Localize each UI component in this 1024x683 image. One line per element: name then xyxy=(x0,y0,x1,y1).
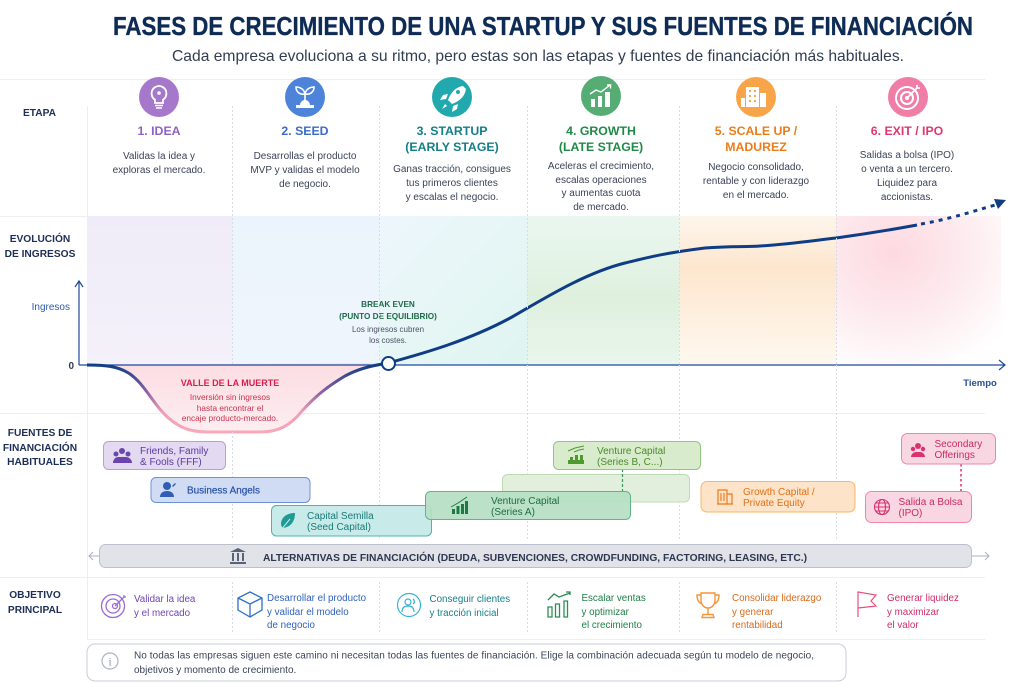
callout: break even: los costes. xyxy=(369,336,407,345)
text: exit description: accionistas. xyxy=(881,192,933,203)
funding: secondary offerings: Offerings xyxy=(934,450,975,461)
funding: salida a bolsa: (IPO) xyxy=(898,508,922,519)
callout: valle de la muerte: hasta encontrar el xyxy=(197,403,263,413)
arrows: left and right xyxy=(89,552,989,560)
funding: growth capital: Growth Capital / xyxy=(743,487,815,498)
stage 1: idea xyxy=(113,77,205,176)
objective 4: y optimizar xyxy=(582,607,630,618)
subtitle: Cada empresa evoluciona a su ritmo, pero estas son las etapas y fuentes de financiación más habituales. xyxy=(172,48,904,65)
callout: break even: (PUNTO DE EQUILIBRIO) xyxy=(339,312,437,321)
row label: etapa: ETAPA xyxy=(23,108,57,119)
objective 5: Consolidar liderazgo xyxy=(732,593,822,604)
text: seed description: de negocio. xyxy=(279,179,331,190)
callout: valle de la muerte: Inversión sin ingresos xyxy=(190,392,270,402)
text: idea description: exploras el mercado. xyxy=(113,165,205,176)
heading: growth: 4. GROWTH xyxy=(566,124,636,138)
axis label: tiempo: Tiempo xyxy=(963,378,997,389)
curve: valley of death xyxy=(87,363,388,432)
heading: seed: 2. SEED xyxy=(281,124,329,138)
callout: note xyxy=(87,644,846,681)
callout: valle de la muerte: encaje producto-mercado. xyxy=(182,413,278,423)
icon: growth xyxy=(568,446,584,464)
objective 5: y generar xyxy=(732,607,774,618)
funding: growth capital xyxy=(701,482,855,512)
funding: friends family fools: & Fools (FFF) xyxy=(140,457,202,468)
row label: fuentes de financiacion: FINANCIACIÓN xyxy=(3,441,77,454)
funding: secondary offerings: Secondary xyxy=(934,439,982,450)
funding: alternativas: ALTERNATIVAS DE FINANCIACIÓN (DEUDA, SUBVENCIONES, CROWDFUNDING, FACTORING, LEASING, ETC.) xyxy=(263,551,807,564)
objective 6: el valor xyxy=(887,620,919,631)
stage 4: growth xyxy=(548,76,654,213)
funding: business angels: Business Angels xyxy=(187,486,260,496)
callout: break even: Los ingresos cubren xyxy=(352,325,424,334)
funding: venture capital series a: (Series A) xyxy=(491,507,535,518)
icon: bars xyxy=(451,497,468,514)
objective 2: de negocio xyxy=(267,620,315,631)
funding: venture capital series b xyxy=(554,442,700,470)
icon: investor xyxy=(160,482,176,497)
row label: objetivo principal: PRINCIPAL xyxy=(8,605,62,616)
callout: break even: BREAK EVEN xyxy=(361,300,415,309)
icon: seedling xyxy=(285,77,325,117)
row label: fuentes de financiacion: HABITUALES xyxy=(7,457,73,468)
heading: exit: 6. EXIT / IPO xyxy=(871,124,944,138)
stage 3: startup xyxy=(393,77,511,203)
funding: capital semilla: (Seed Capital) xyxy=(307,522,371,533)
text: exit description: Liquidez para xyxy=(877,178,937,189)
funding: capital semilla: Capital Semilla xyxy=(307,511,374,522)
objective 5: rentabilidad xyxy=(732,620,783,631)
funding: venture capital series a: Venture Capital xyxy=(491,496,559,507)
text: growth description: de mercado. xyxy=(573,202,629,213)
funding: salida a bolsa xyxy=(866,492,972,522)
callout: valle de la muerte xyxy=(181,378,279,423)
icon: flag xyxy=(858,592,876,617)
row label: fuentes de financiacion: FUENTES DE xyxy=(8,428,72,439)
axis label: ingresos: Ingresos xyxy=(32,302,70,313)
panel: revenue evolution chart xyxy=(5,199,1006,432)
icon: globe xyxy=(874,500,890,514)
stage 6: exit xyxy=(860,77,954,203)
icon: target xyxy=(102,594,126,618)
text: scale up description: rentable y con liderazgo xyxy=(703,176,810,187)
valley of death area xyxy=(87,363,388,432)
objective 1: y el mercado xyxy=(134,608,191,619)
text: scale up description: en el mercado. xyxy=(723,190,789,201)
icon: box xyxy=(238,592,262,617)
callout: break even xyxy=(339,300,437,345)
text: growth description: Aceleras el crecimiento, xyxy=(548,161,654,172)
heading: idea: 1. IDEA xyxy=(137,124,181,138)
objective 6: Generar liquidez xyxy=(887,593,959,604)
text: exit description: Salidas a bolsa (IPO) xyxy=(860,150,954,161)
row label: objetivo principal: OBJETIVO xyxy=(9,590,61,601)
text: startup description: tus primeros clientes xyxy=(406,178,498,189)
callout: valle de la muerte: VALLE DE LA MUERTE xyxy=(181,378,279,388)
text: seed description: Desarrollas el producto xyxy=(254,151,357,162)
funding: growth capital: Private Equity xyxy=(743,498,805,509)
objective 4 xyxy=(548,592,646,631)
icon: info xyxy=(102,653,118,669)
callout: note: objetivos y momento de crecimiento. xyxy=(134,665,296,676)
axis label: zero: 0 xyxy=(68,361,74,372)
row label: evolucion de ingresos: DE INGRESOS xyxy=(5,249,76,260)
funding: alternativas xyxy=(89,544,989,568)
heading: growth: (LATE STAGE) xyxy=(559,140,643,154)
icon: light bulb xyxy=(139,77,179,117)
connector: ipo to secondary xyxy=(960,464,962,491)
text: growth description: y aumentas cuota xyxy=(562,188,641,199)
objective 3: Conseguir clientes xyxy=(430,594,510,605)
row label: evolucion de ingresos: EVOLUCIÓN xyxy=(10,232,70,245)
objective 4: el crecimiento xyxy=(582,620,642,631)
icon: info: i xyxy=(108,654,112,668)
heading: scale up: 5. SCALE UP / xyxy=(715,124,798,138)
text: exit description: o venta a un tercero. xyxy=(861,164,953,175)
marker: break even xyxy=(382,357,395,370)
icon: office building xyxy=(717,490,733,504)
axes xyxy=(75,281,1005,370)
icon: users in circle xyxy=(398,594,420,616)
funding: venture capital series b: (Series B, C...) xyxy=(597,457,663,468)
text: seed description: MVP y validas el modelo xyxy=(250,165,360,176)
stage 2: seed xyxy=(250,77,360,190)
icon: growth chart xyxy=(581,76,621,116)
text: growth description: escalas operaciones xyxy=(555,175,647,186)
objective 1 xyxy=(102,594,196,619)
callout: note: No todas las empresas siguen este camino ni necesitan todas las fuentes de financiación. Elige la combinación adecuada según tu modelo de negocio, xyxy=(134,650,814,662)
heading: startup: (EARLY STAGE) xyxy=(405,140,499,154)
funding: friends family fools: Friends, Family xyxy=(140,446,208,457)
text: idea description: Validas la idea y xyxy=(123,151,195,162)
text: startup description: y escalas el negocio. xyxy=(406,192,498,203)
icon: bank xyxy=(230,548,246,564)
icon: buildings xyxy=(736,77,776,117)
funding: salida a bolsa: Salida a Bolsa xyxy=(898,497,963,508)
funding: business angels xyxy=(151,478,310,502)
funding: friends family fools xyxy=(104,442,226,470)
funding: venture capital series b: Venture Capital xyxy=(597,446,665,457)
funding: capital semilla xyxy=(272,506,432,536)
icon: shareholders xyxy=(911,443,925,457)
funding: venture capital connector band xyxy=(502,474,690,502)
curve: growth xyxy=(388,225,917,363)
objective 5 xyxy=(697,593,822,631)
text: scale up description: Negocio consolidado, xyxy=(708,162,804,173)
objective 6: y maximizar xyxy=(887,607,940,618)
icon: people xyxy=(113,448,132,463)
heading: scale up: MADUREZ xyxy=(725,140,787,154)
icon: trophy xyxy=(697,593,719,618)
stage colour bands xyxy=(87,216,1001,365)
stage 5: scale up xyxy=(703,77,810,201)
objective 6 xyxy=(858,592,959,631)
curve: dotted projection with arrow xyxy=(921,199,1006,224)
icon: growth bars xyxy=(548,592,570,617)
objective 2: Desarrollar el producto xyxy=(267,593,367,604)
objective 2: y validar el modelo xyxy=(267,607,349,618)
heading: startup: 3. STARTUP xyxy=(417,124,487,138)
objective 3: y tracción inicial xyxy=(430,608,499,619)
icon: leaf xyxy=(281,513,295,530)
objective 4: Escalar ventas xyxy=(582,593,646,604)
objective 3 xyxy=(398,594,510,619)
icon: target xyxy=(888,77,928,117)
text: startup description: Ganas tracción, consigues xyxy=(393,164,511,175)
funding: venture capital series a xyxy=(426,492,630,520)
objective 1: Validar la idea xyxy=(134,594,196,605)
funding: secondary offerings xyxy=(902,434,996,464)
connector: series a to series b xyxy=(622,469,624,491)
objective 2 xyxy=(238,592,367,631)
icon: rocket xyxy=(432,77,472,117)
